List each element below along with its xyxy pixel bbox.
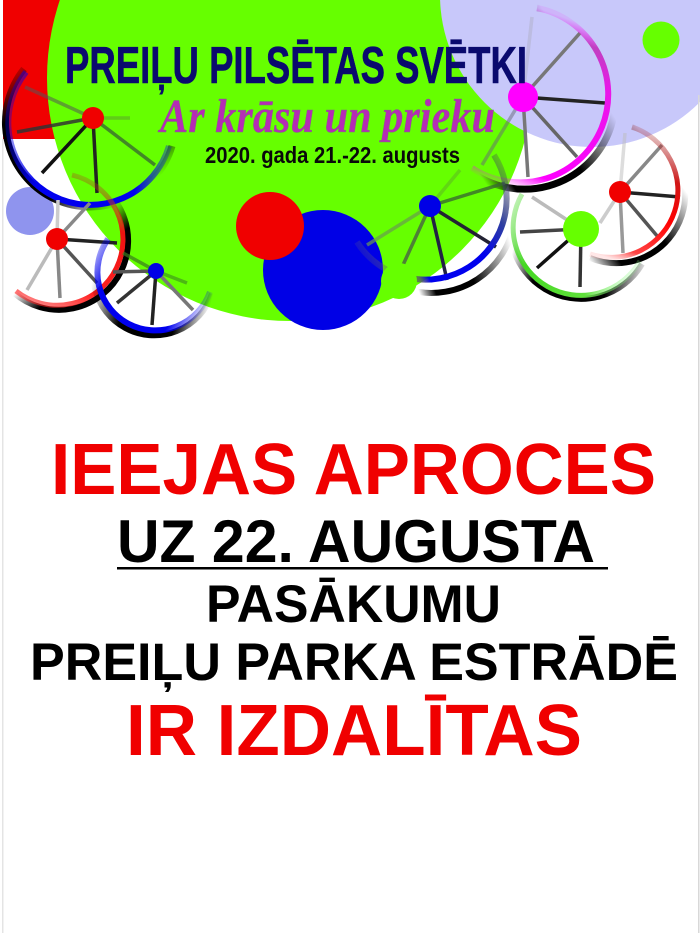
red corner block bbox=[3, 0, 63, 139]
red circle bbox=[236, 192, 304, 260]
wheel: small blue rim bbox=[93, 237, 212, 335]
headline: entry wristbands: IEEJAS APROCES bbox=[51, 430, 656, 510]
slogan: Ar krāsu un prieku bbox=[157, 90, 495, 143]
wheel: red rim left bbox=[14, 173, 128, 310]
wheel: blue centre rim bbox=[355, 153, 515, 293]
wheel: green rim bbox=[510, 192, 642, 299]
wheel: red rim right bbox=[590, 127, 685, 263]
date underline bbox=[117, 567, 608, 570]
date line: UZ 22. AUGUSTA bbox=[117, 508, 595, 575]
small periwinkle circle bbox=[6, 187, 54, 235]
large blue circle bbox=[263, 210, 383, 330]
wheel: magenta rim bbox=[470, 8, 616, 189]
green blob over blue rim bbox=[381, 263, 417, 299]
headline: distributed: IR IZDALĪTAS bbox=[126, 691, 582, 771]
event date: 2020. gada 21.-22. augusts bbox=[205, 142, 460, 168]
small green circle bbox=[642, 22, 680, 58]
large green circle bbox=[47, 0, 533, 321]
venue line: PREIĻU PARKA ESTRĀDĒ bbox=[30, 633, 678, 692]
lavender circle bbox=[440, 0, 700, 147]
wheel: red top left blue rim bbox=[5, 69, 172, 207]
event line: PASĀKUMU bbox=[206, 575, 501, 634]
